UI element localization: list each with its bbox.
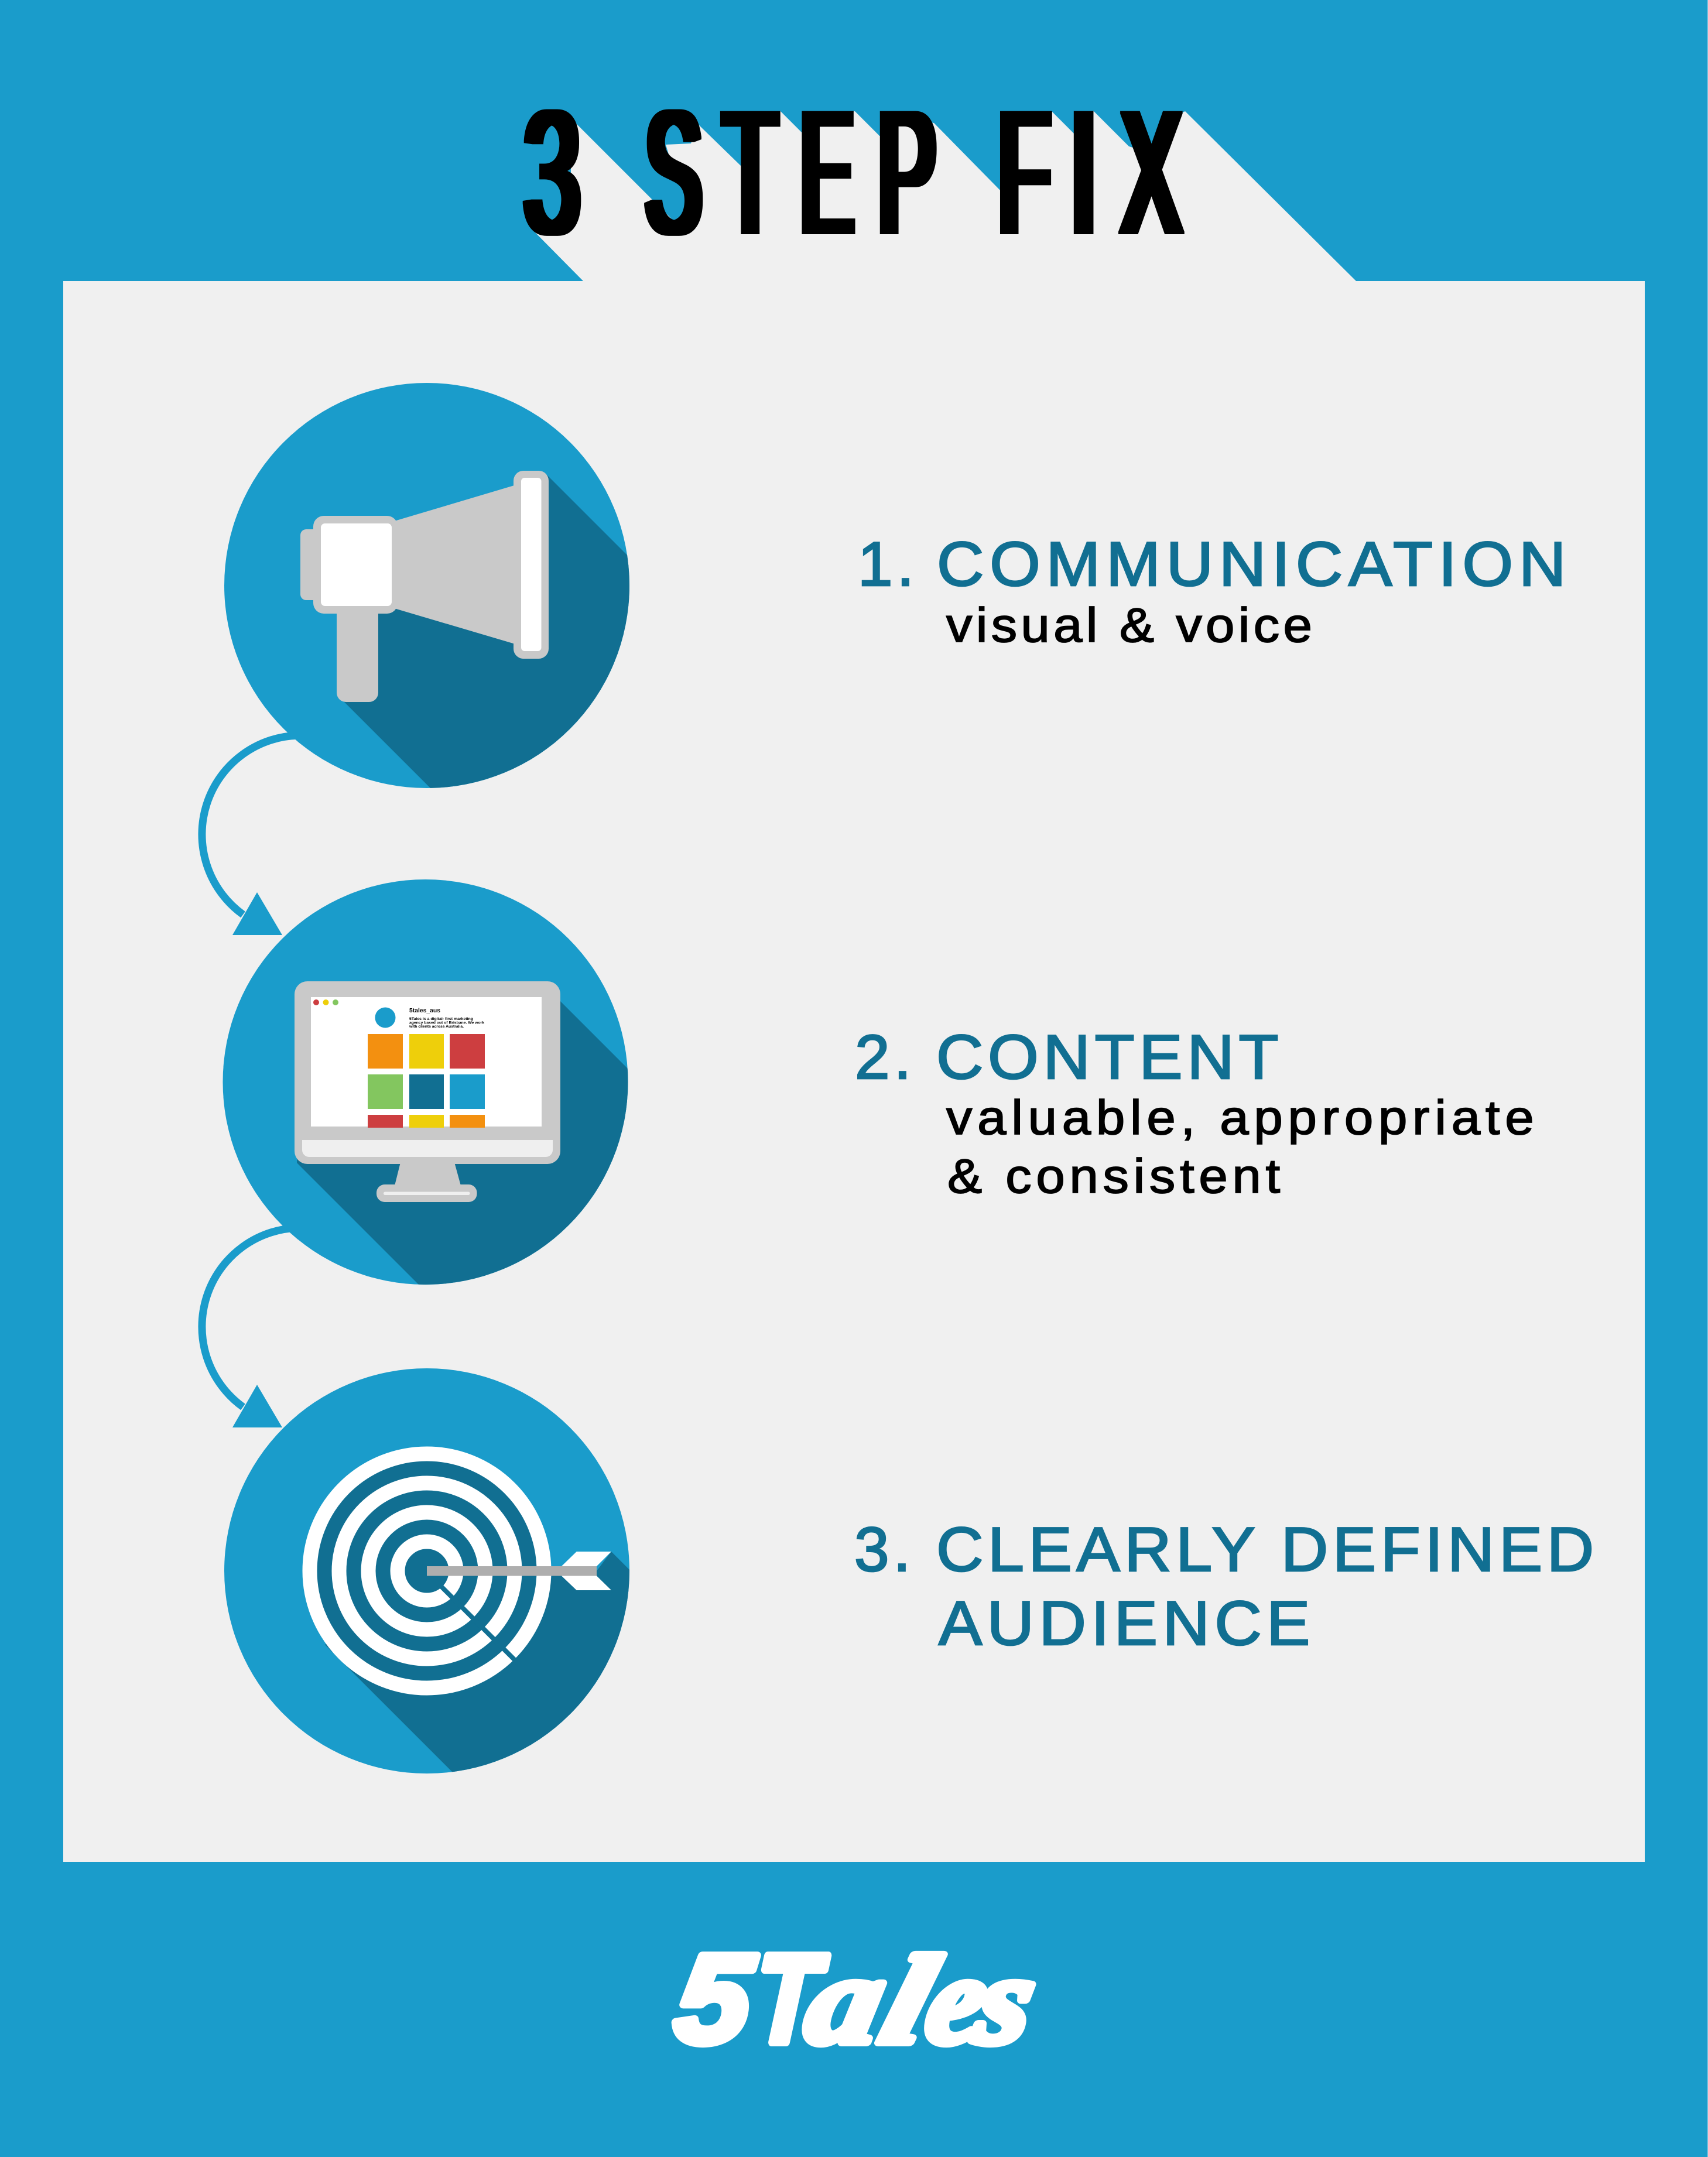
step 3 heading: AUDIENCE: [939, 1588, 1310, 1659]
screen: social profile: [313, 999, 485, 1128]
step 1 heading: COMMUNICATION: [937, 529, 1566, 600]
title: E: [800, 74, 853, 271]
step 3 heading: 3.: [854, 1514, 915, 1584]
step 1 heading: 1.: [858, 529, 918, 599]
icon: megaphone: [224, 383, 629, 788]
logo: 5Tales: 5: [669, 1928, 760, 2069]
step 1 subtitle: visual & voice: [946, 598, 1312, 652]
icon: target with arrow: [224, 1368, 629, 1773]
title: [524, 74, 1181, 271]
screen: social profile: agency based out of Brisbane. We work: [409, 1021, 484, 1025]
screen: social profile: 5Tales is a digital- first marketing: [409, 1017, 473, 1021]
logo: 5Tales: l: [868, 1930, 950, 2070]
title: P: [878, 75, 936, 271]
step 3 heading: CLEARLY DEFINED: [936, 1515, 1594, 1585]
logo: 5Tales: [669, 1928, 1046, 2070]
title: I: [1070, 74, 1097, 271]
logo: 5Tales: a: [796, 1930, 896, 2070]
right edge sliver: [1707, 0, 1708, 2157]
arrow: step 1 to step 2: [202, 735, 301, 935]
logo: 5Tales: s: [966, 1930, 1046, 2070]
title long shadow: [534, 111, 1357, 282]
step 2 subtitle: valuable, appropriate: [946, 1091, 1534, 1145]
title: T: [724, 74, 777, 271]
step 2 subtitle: & consistent: [947, 1149, 1280, 1203]
logo: 5Tales: T: [751, 1929, 830, 2069]
step 2 heading: CONTENT: [936, 1022, 1278, 1093]
screen: social profile: 5tales_aus: [409, 1008, 440, 1014]
icon: desktop monitor: [223, 879, 628, 1285]
arrow: step 2 to step 3: [202, 1228, 301, 1427]
title: X: [1121, 75, 1181, 271]
screen: social profile: with clients across Australia.: [409, 1025, 464, 1029]
title: F: [998, 74, 1050, 271]
light content panel: [63, 281, 1645, 1862]
step 2 subtitle: [946, 1091, 1534, 1203]
title: 3: [524, 74, 580, 271]
logo: 5Tales: e: [918, 1930, 998, 2070]
title: S: [646, 74, 701, 271]
step 3 heading: [854, 1514, 1594, 1659]
step 2 heading: 2.: [855, 1022, 915, 1092]
